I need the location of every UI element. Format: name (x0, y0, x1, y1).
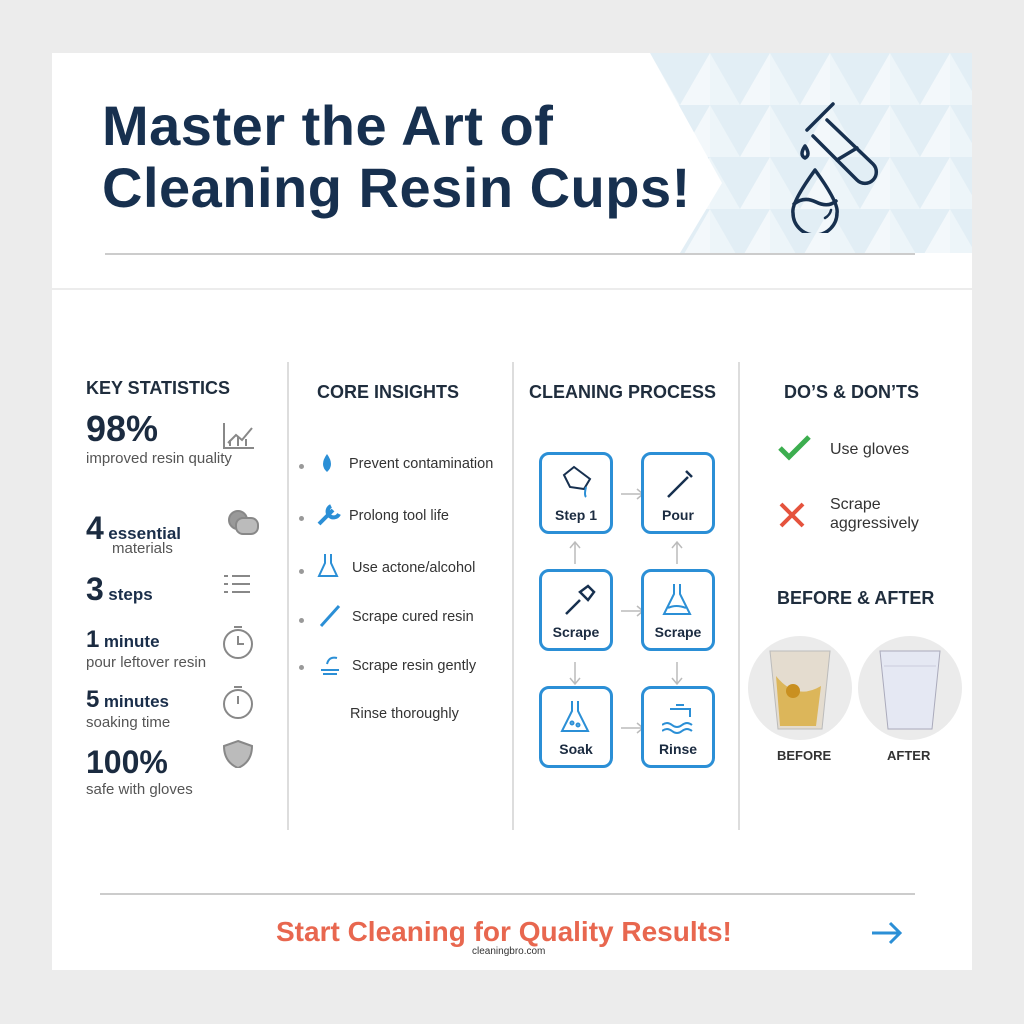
heading: core insights: CORE INSIGHTS (317, 382, 459, 402)
insight list: Scrape cured resin (352, 609, 474, 625)
before image (748, 636, 852, 740)
step: Pour: Pour (662, 507, 694, 523)
step: Soak (539, 686, 613, 768)
step: Rinse (641, 686, 715, 768)
don't: scrape aggressively (780, 496, 919, 532)
heading: before & after: BEFORE & AFTER (777, 588, 934, 608)
stat 98%: 98% (86, 408, 158, 449)
insight list: Prevent contamination (349, 456, 493, 472)
stat 100%: safe with gloves (86, 781, 193, 798)
stat 98% (86, 408, 232, 467)
insight list: Scrape resin gently (352, 658, 476, 674)
column: cleaning process (529, 382, 716, 768)
header pattern background (650, 53, 972, 253)
stat 4: materials (112, 540, 173, 557)
heading: key statistics: KEY STATISTICS (86, 378, 230, 398)
step: Scrape (flask) (641, 569, 715, 651)
column: key statistics (86, 378, 259, 798)
insight list (299, 454, 493, 722)
step: Rinse: Rinse (659, 741, 697, 757)
stat 100% (86, 744, 193, 798)
stat 5 minutes: 5 minutes (86, 686, 169, 713)
icon: test tube and drop (791, 102, 878, 233)
insight list: Prolong tool life (349, 508, 449, 524)
header divider (105, 253, 915, 255)
heading: cleaning process: CLEANING PROCESS (529, 382, 716, 402)
stat 3: 3 steps (86, 571, 153, 607)
insight list: Use actone/alcohol (352, 560, 475, 576)
arrow (872, 922, 902, 944)
stat 4: 4 essential (86, 510, 181, 546)
label: after: AFTER (887, 748, 930, 763)
stat 5 minutes (86, 686, 170, 731)
don't: scrape aggressively: aggressively (830, 515, 919, 532)
stat 100%: 100% (86, 744, 168, 780)
title: Master the Art of (102, 94, 553, 157)
don't: scrape aggressively: Scrape (830, 496, 881, 513)
insight list: Rinse thoroughly (350, 706, 459, 722)
step: Scrape (flask): Scrape (655, 624, 701, 640)
call to action: Start Cleaning for Quality Results! (276, 916, 732, 947)
column: core insights (299, 382, 493, 722)
step: Pour (641, 452, 715, 534)
process flow grid (539, 452, 715, 768)
watermark: cleaningbro.com (472, 946, 545, 957)
stat 1 minute: pour leftover resin (86, 654, 206, 671)
stat icons (223, 423, 259, 768)
do: use gloves (778, 435, 909, 460)
column: do's and don'ts (748, 382, 962, 763)
header panel (52, 53, 972, 288)
step: Scrape (539, 569, 613, 651)
title (102, 94, 691, 219)
step: Scrape: Scrape (553, 624, 599, 640)
do: use gloves: Use gloves (830, 441, 909, 458)
heading: do's and don'ts: DO’S & DON’TS (784, 382, 919, 402)
stat 1 minute: 1 minute (86, 626, 160, 653)
step: Step 1 (539, 452, 613, 534)
main panel (52, 290, 972, 970)
stat 98%: improved resin quality (86, 450, 232, 467)
step: Step 1: Step 1 (555, 507, 597, 523)
step: Soak: Soak (559, 741, 593, 757)
stat 1 minute (86, 626, 206, 671)
after image (858, 636, 962, 740)
title: Cleaning Resin Cups! (102, 156, 691, 219)
label: before: BEFORE (777, 748, 831, 763)
stat 5 minutes: soaking time (86, 714, 170, 731)
